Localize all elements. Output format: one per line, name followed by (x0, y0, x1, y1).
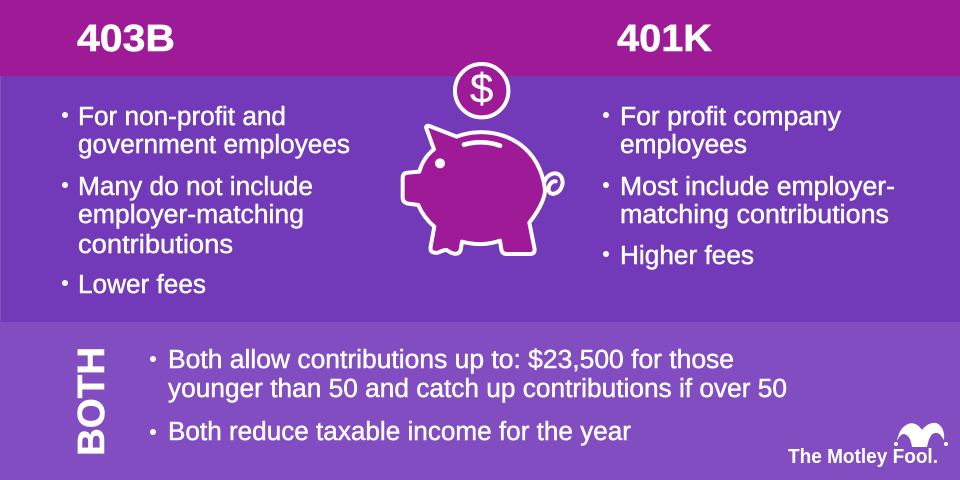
text block: 401K list (603, 103, 895, 270)
text block: 403B list: Many do not include (78, 173, 313, 201)
logo: The Motley Fool (788, 423, 948, 468)
text block: both list (150, 346, 787, 446)
text block: 401K list: Higher fees (620, 242, 754, 270)
icon: dollar coin (455, 64, 508, 117)
icon: dollar coin: $ (470, 64, 493, 112)
text block: 401K list: matching contributions (620, 201, 889, 229)
text block: 401K list: Most include employer- (620, 173, 895, 201)
panel: comparison background (0, 76, 960, 322)
text block: both list: Both reduce taxable income for the year (168, 418, 632, 446)
text block: both list: Both allow contributions up to: $23,500 for those (168, 346, 734, 374)
logo: The Motley Fool: The Motley Fool. (788, 446, 938, 468)
text block: 403B list: government employees (78, 131, 350, 159)
text block: 403B list (62, 103, 350, 299)
text block: 403B list: employer-matching (78, 201, 304, 229)
heading: both: BOTH (71, 347, 113, 456)
text block: 403B list: Lower fees (78, 271, 206, 299)
panel: both band (0, 322, 960, 480)
text block: 401K list: employees (620, 131, 747, 159)
heading: 401K: 401K (617, 18, 713, 60)
text block: 403B list: contributions (78, 231, 233, 259)
icon: piggy bank (403, 126, 563, 254)
text block: 403B list: For non-profit and (78, 103, 286, 131)
heading: 403B: 403B (77, 18, 175, 60)
text block: both list: younger than 50 and catch up contributions if over 50 (168, 375, 787, 403)
panel: header band (0, 0, 960, 76)
text block: 401K list: For profit company (620, 103, 841, 131)
